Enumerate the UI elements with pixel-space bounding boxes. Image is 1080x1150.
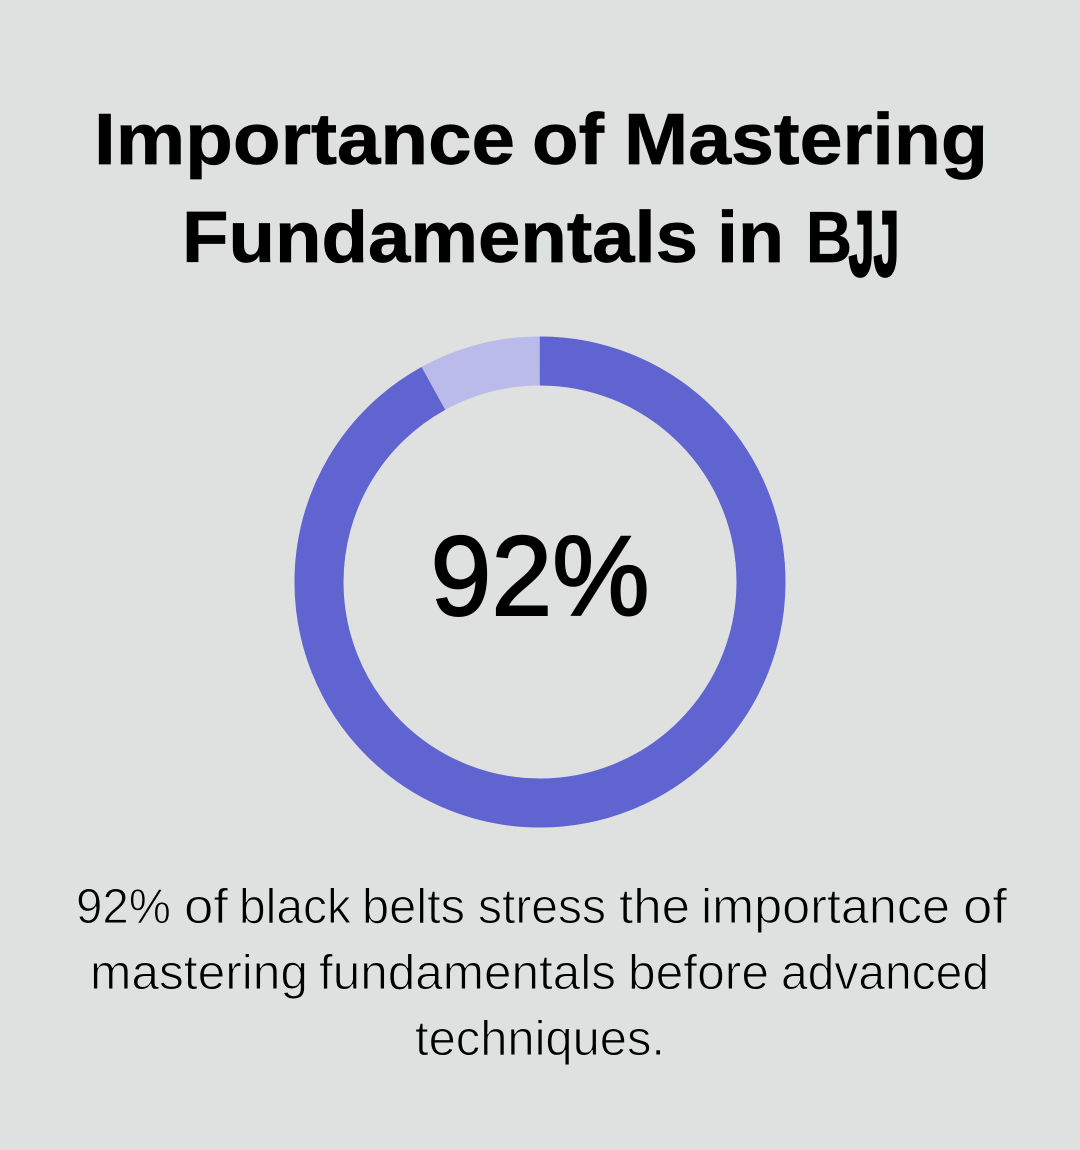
donut remainder: 8% bbox=[319, 361, 761, 803]
title line 2: Fundamentals bbox=[182, 198, 698, 278]
description line 1: 92% bbox=[76, 880, 171, 934]
description line 3: techniques. bbox=[415, 1012, 665, 1066]
title line 2 bbox=[182, 194, 899, 295]
donut chart bbox=[319, 361, 761, 803]
title line 1: Importance bbox=[94, 100, 515, 180]
title line 1 bbox=[94, 100, 988, 180]
description line 2 bbox=[90, 946, 989, 1000]
title line 2: JJ bbox=[849, 194, 899, 295]
center value: 92% bbox=[430, 513, 650, 639]
description line 2: mastering bbox=[90, 946, 308, 1000]
donut arc: 92% bbox=[319, 361, 761, 803]
description line 1: black bbox=[239, 880, 351, 934]
description text bbox=[76, 880, 1007, 1066]
description line 1: of bbox=[963, 880, 1007, 934]
title line 1: Mastering bbox=[624, 100, 988, 180]
title line 2: in bbox=[717, 198, 784, 278]
description line 1: stress bbox=[478, 880, 606, 934]
description line 1 bbox=[76, 880, 1007, 934]
title line 1: of bbox=[532, 100, 605, 180]
description line 2: before bbox=[628, 946, 769, 1000]
title bbox=[94, 100, 988, 295]
description line 1: importance bbox=[701, 880, 950, 934]
title line 2: B bbox=[806, 198, 852, 278]
description line 1: of bbox=[184, 880, 228, 934]
description line 2: fundamentals bbox=[319, 946, 616, 1000]
description line 1: belts bbox=[362, 880, 465, 934]
description line 1: the bbox=[619, 880, 690, 934]
description line 2: advanced bbox=[781, 946, 989, 1000]
